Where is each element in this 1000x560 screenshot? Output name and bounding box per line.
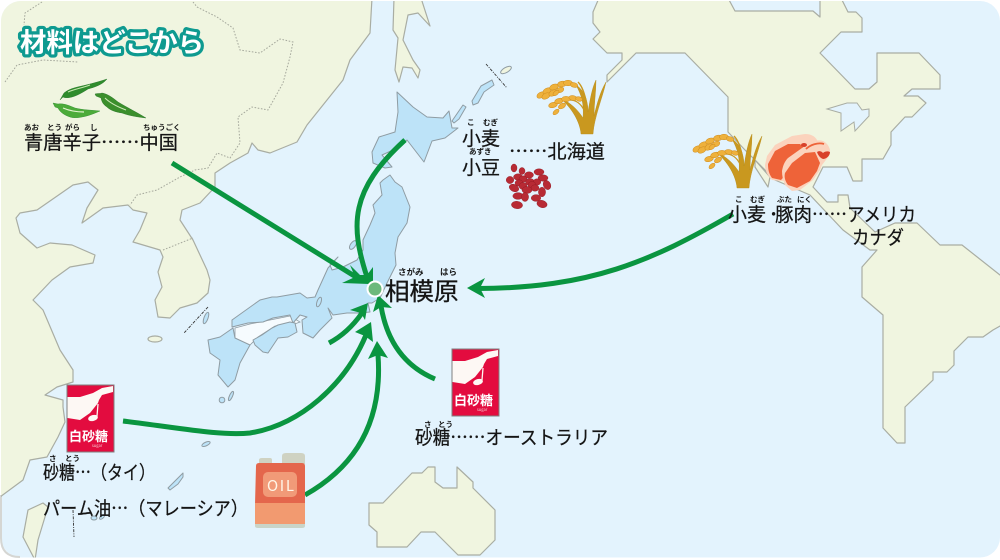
label: America and Canada: 豚肉: [775, 200, 812, 227]
label: America and Canada: カナダ: [852, 223, 904, 250]
label: Hokkaido wheat and beans: [462, 117, 605, 180]
national borders: [5, 2, 293, 250]
icon: pork meat: [765, 134, 830, 191]
arrow: Australia to Sagamihara: [373, 295, 435, 379]
label: America and Canada: 小麦: [728, 200, 766, 227]
icon: sugar bag (Australia): 白砂糖: [454, 390, 493, 409]
label: green pepper from China: あお: [24, 122, 39, 133]
Honshu: [232, 175, 410, 338]
title: 材料はどこから: [20, 21, 204, 60]
label: Sagamihara: 相模原: [385, 273, 458, 308]
icon: sugar bag (Thailand): sugar: [92, 443, 103, 449]
Japan archipelago: [91, 65, 512, 520]
label: green pepper from China: 青唐辛子……中国: [24, 128, 178, 155]
label: sugar from Australia: とう: [438, 419, 453, 430]
label: green pepper from China: とう: [47, 122, 62, 133]
label: Hokkaido wheat and beans: 小麦: [462, 124, 500, 151]
label: Sagamihara: さがみ: [398, 266, 424, 278]
land: Jeju: [148, 336, 162, 342]
label: Hokkaido wheat and beans: むぎ: [483, 117, 498, 128]
icon: sugar bag (Australia): [452, 349, 499, 416]
label: Hokkaido wheat and beans: ……北海道: [509, 137, 605, 164]
arrow: domestic to Sagamihara: [329, 303, 368, 343]
land: Sakhalin: [393, 0, 430, 82]
lake: Great Lakes: [827, 103, 869, 131]
icon: red beans: [506, 164, 552, 209]
arrow: China to Sagamihara: [172, 163, 369, 284]
Shikoku: [253, 322, 297, 353]
icon: sugar bag (Thailand): [67, 385, 114, 452]
icon: green peppers: [53, 79, 146, 118]
arrow: Malaysia to Sagamihara: [305, 341, 388, 495]
label: Sagamihara: はら: [440, 266, 457, 278]
inland sea: [235, 316, 300, 345]
small islands: [349, 240, 356, 250]
icon: sugar bag (Thailand): 白砂糖: [69, 426, 108, 445]
label: sugar from Australia: さ: [424, 419, 432, 430]
label: sugar from Thailand: さ: [49, 453, 56, 464]
land: Taiwan: [23, 503, 48, 560]
label: Hokkaido wheat and beans: 小豆: [462, 153, 500, 180]
icon: oil can: OIL: [267, 475, 294, 496]
label: America and Canada: ·: [768, 200, 779, 227]
label: green pepper from China: ちゅうごく: [143, 122, 180, 133]
label: America and Canada: むぎ: [750, 194, 765, 205]
arrow: Thailand to Sagamihara: [123, 322, 373, 434]
boundary lines at sea: [73, 64, 507, 537]
label: sugar from Thailand: 砂糖…（タイ）: [43, 458, 155, 485]
arrow: Hokkaido to Sagamihara: [357, 140, 405, 288]
Hokkaido: [372, 92, 458, 168]
land: Asia: [0, 0, 372, 497]
label: Hokkaido wheat and beans: こ: [467, 117, 474, 128]
Kyushu: [208, 328, 250, 387]
label: sugar from Thailand: とう: [65, 453, 80, 464]
label: America and Canada: こ: [735, 194, 742, 205]
Kuril islands: [472, 80, 494, 105]
label: green pepper from China: がら: [65, 122, 80, 133]
icon: oil can: [255, 453, 305, 528]
land: North America: [593, 0, 1000, 443]
label: sugar from Australia: 砂糖……オーストラリア: [415, 423, 608, 450]
label: America and Canada: ぶた: [777, 194, 792, 205]
label: America and Canada: ……アメリカ: [812, 200, 916, 227]
icon: wheat (Hokkaido): [536, 80, 606, 134]
label: America and Canada: にく: [797, 194, 812, 205]
label: America and Canada: [728, 194, 916, 250]
land: Baja California: [755, 160, 770, 187]
icon: wheat (America): [692, 134, 762, 188]
label: Hokkaido wheat and beans: あずき: [469, 146, 492, 157]
icon: sugar bag (Australia): sugar: [477, 407, 488, 413]
label: green pepper from China: し: [90, 122, 98, 133]
marker: Sagamihara: [368, 282, 382, 296]
label: palm oil from Malaysia: パーム油…（マレーシア）: [43, 494, 248, 521]
land: Australia: [369, 467, 495, 555]
arrow: America to Sagamihara: [467, 214, 733, 298]
